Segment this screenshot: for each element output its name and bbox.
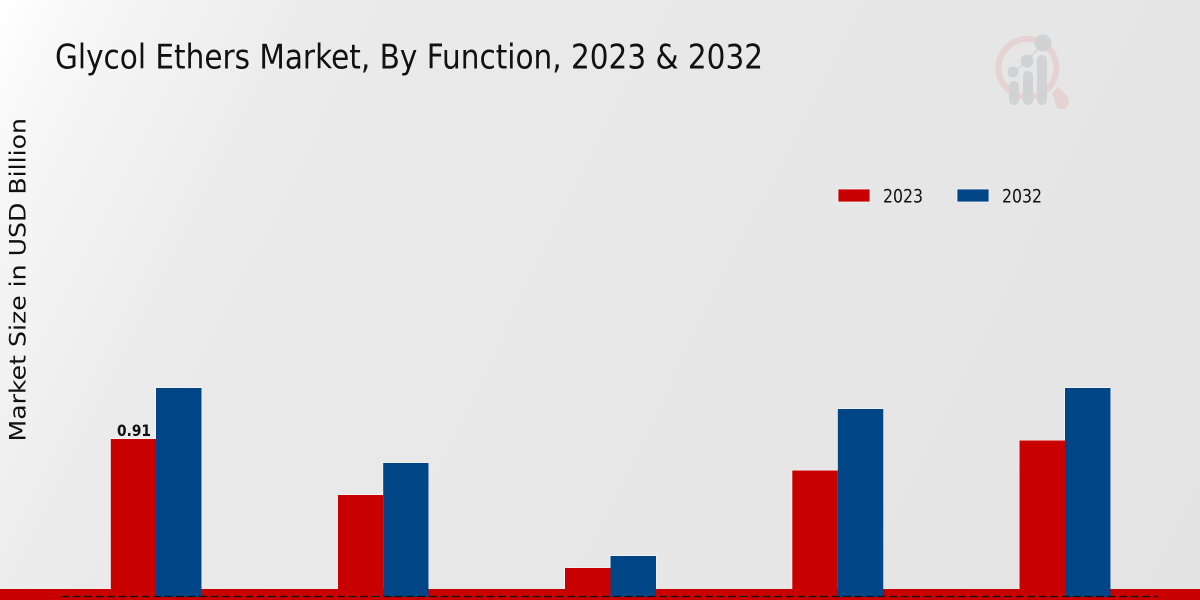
legend item: 2023: 2023 xyxy=(883,186,923,208)
bars: group 2 xyxy=(338,463,428,600)
bars: group 1 xyxy=(111,388,202,600)
baseline band xyxy=(0,589,1200,600)
legend item: 2032: 2032 xyxy=(1002,186,1042,208)
bars: group 3 xyxy=(565,556,656,600)
legend item: 2023 xyxy=(838,186,923,208)
bars: group 4 xyxy=(792,409,883,600)
legend item: 2032 xyxy=(957,186,1042,208)
icon: watermark logo xyxy=(998,34,1069,109)
legend xyxy=(838,186,1042,208)
y axis label: Market Size in USD Billion xyxy=(6,118,32,442)
value label: 0.91: 0.91 xyxy=(117,421,151,440)
title: Glycol Ethers Market, By Function, 2023 & 2032 xyxy=(55,38,763,78)
bars: group 5 xyxy=(1020,388,1110,600)
dashed x axis line xyxy=(61,596,1158,598)
